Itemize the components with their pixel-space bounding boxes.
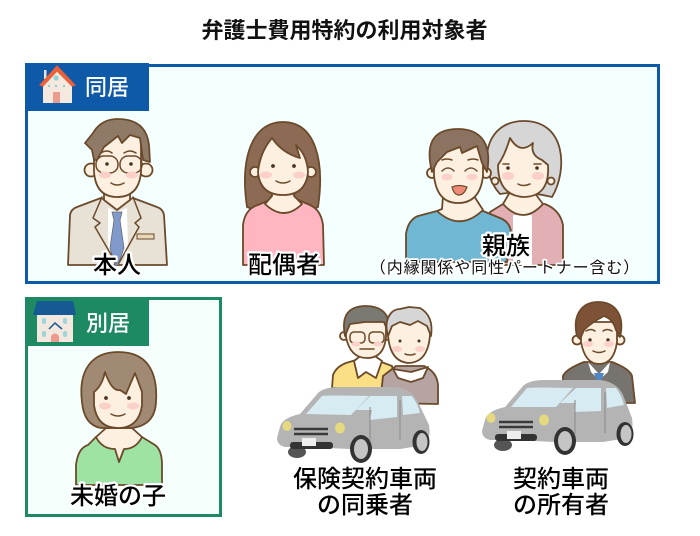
icon: house — [40, 66, 75, 103]
group: 所有者 illustration — [482, 302, 635, 455]
label: 保険契約車両の同乗者: 保険契約車両 — [293, 466, 437, 493]
person: 本人 — [68, 119, 167, 265]
label: 本人: 本人 — [93, 252, 141, 279]
label: 配偶者: 配偶者 — [248, 252, 320, 279]
person: 親族 woman — [487, 121, 563, 265]
panel: 同居 — [25, 63, 658, 282]
header: 別居 — [25, 300, 149, 346]
car — [482, 380, 634, 455]
label: 親族: 親族 — [482, 233, 530, 260]
header label: 別居 — [86, 311, 130, 336]
person: 親族 man — [406, 129, 511, 262]
label: 保険契約車両の同乗者 — [293, 466, 437, 519]
person: older man — [332, 306, 396, 388]
person: 未婚の子 — [76, 352, 162, 485]
person: 配偶者 — [243, 122, 324, 265]
label: 未婚の子: 未婚の子 — [70, 483, 166, 510]
person: owner — [563, 302, 635, 403]
header: 同居 — [25, 63, 149, 111]
label: 保険契約車両の同乗者: の同乗者 — [317, 492, 413, 519]
label: 契約車両の所有者: の所有者 — [513, 492, 609, 519]
icon: house — [33, 301, 76, 342]
note: 親族: （内縁関係や同性パートナー含む） — [370, 259, 640, 277]
car — [277, 387, 430, 463]
label: 契約車両の所有者 — [513, 466, 609, 519]
title: 弁護士費用特約の利用対象者 — [201, 18, 488, 43]
header label: 同居 — [85, 75, 129, 100]
person: older woman — [380, 307, 438, 404]
label: 契約車両の所有者: 契約車両 — [513, 466, 609, 493]
group: 同乗者 illustration — [277, 306, 438, 463]
panel: 別居 — [25, 298, 220, 516]
